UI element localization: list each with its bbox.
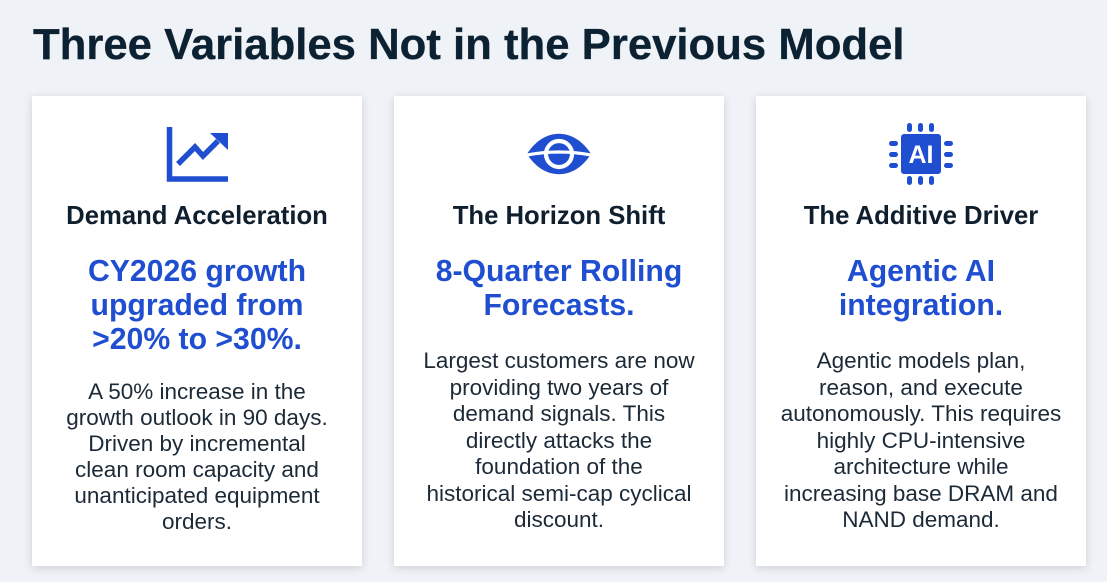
panel: the horizon shift [394,96,724,566]
key statement: >20% to >30%. [92,323,302,356]
key statement [839,255,1003,322]
body text: providing two years of [450,374,668,400]
body text: A 50% increase in the [88,379,306,404]
body text: orders. [162,509,232,534]
key statement [88,255,306,356]
body text: discount. [514,507,604,532]
body text: Driven by incremental [88,431,306,456]
icon: AI chip: AI [908,141,934,169]
title: Three Variables Not in the Previous Model [33,20,905,69]
body text: directly attacks the [466,428,652,452]
body text: Largest customers are now [423,348,695,373]
panel: the additive driver [756,96,1086,566]
heading: The Additive Driver [804,202,1038,230]
body text: Agentic models plan, [817,348,1025,373]
body text: historical semi-cap cyclical [426,480,692,506]
body text: foundation of the [475,454,643,479]
key statement [436,255,682,322]
body text: increasing base DRAM and [784,480,1058,506]
body text [423,348,695,532]
body text: demand signals. This [453,401,665,426]
key statement: Forecasts. [483,289,634,322]
heading: Demand Acceleration [66,202,328,230]
body text: reason, and execute [819,374,1023,400]
icon: AI chip [889,123,953,185]
body text: autonomously. This requires [781,401,1061,426]
icon: growth chart [166,127,228,182]
heading: The Horizon Shift [453,202,665,230]
body text: unanticipated equipment [74,483,320,508]
panel: demand acceleration [32,96,362,566]
key statement: 8-Quarter Rolling [436,255,682,288]
body text [66,379,328,534]
body text: growth outlook in 90 days. [66,405,328,430]
body text: highly CPU-intensive [817,428,1025,452]
body text: architecture while [833,454,1009,479]
key statement: Agentic AI [847,255,995,288]
body text [781,348,1061,532]
icon: eye with horizon [527,134,591,174]
body text: NAND demand. [842,507,1000,532]
key statement: CY2026 growth [88,255,306,288]
key statement: upgraded from [90,289,304,322]
key statement: integration. [839,289,1003,322]
body text: clean room capacity and [75,457,319,482]
